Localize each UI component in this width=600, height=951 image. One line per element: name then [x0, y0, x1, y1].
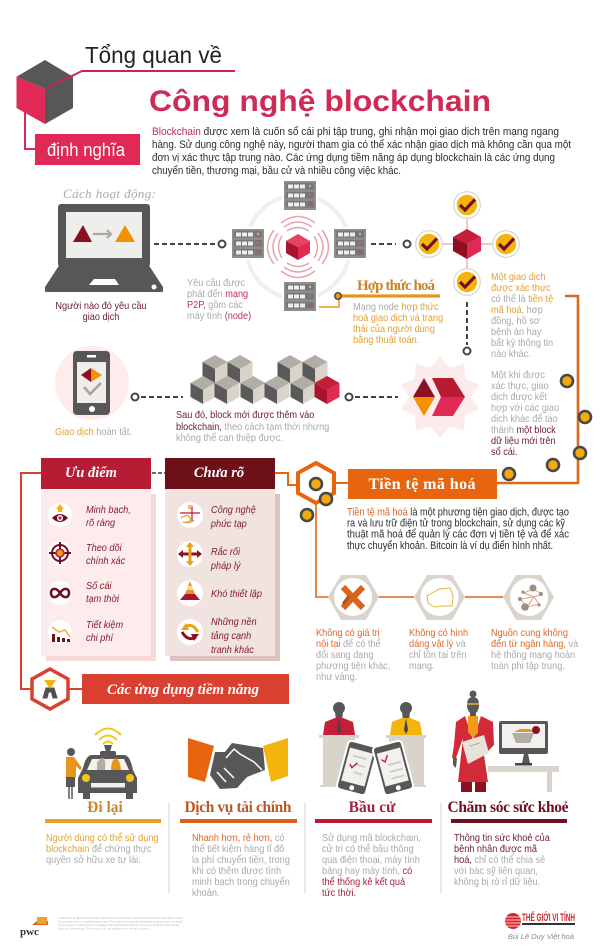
- heading: Đi lại: Đi lại: [87, 799, 124, 816]
- dashed connector 2: [371, 240, 410, 248]
- caption: transaction complete: Giao dịch hoàn tất.: [55, 427, 132, 438]
- text: transport: blockchain để chứng thực: [46, 844, 152, 855]
- text: no physical form: [409, 628, 468, 672]
- text: block added: [176, 410, 329, 444]
- intro paragraph: hàng. Sử dụng công nghệ này, người tham gia có thể xác nhận giao dịch mà không cần qua một: [152, 139, 571, 151]
- illustration: handshake: [188, 738, 288, 789]
- text: P2P: Yêu cầu được: [187, 278, 245, 289]
- caption: laptop: giao dịch: [83, 312, 119, 323]
- text: no intrinsic value: như vàng.: [316, 672, 357, 683]
- icon: smartphone: [55, 346, 129, 420]
- text: validated transaction: đồng, hồ sơ: [491, 316, 540, 327]
- text: no intrinsic value: phương tiện khác,: [316, 661, 390, 672]
- text: validated transaction: bệnh án hay: [491, 327, 542, 338]
- connector: crypto features: [316, 503, 503, 597]
- text: new block: [491, 370, 559, 458]
- text: healthcare: bệnh nhân được mã: [454, 844, 538, 855]
- intro paragraph: [152, 126, 571, 177]
- panel: Ưu điểm: Minh bạch,: [86, 505, 131, 516]
- dashed connector 5: [132, 394, 183, 400]
- panel: Chưa rõ: Khó thiết lập: [211, 589, 263, 600]
- text: no physical form: Không có hình: [409, 628, 468, 639]
- panel: Chưa rõ: Những nền: [211, 617, 257, 628]
- panel: Chưa rõ: Công nghệ: [211, 505, 256, 516]
- text: healthcare: hoá, chỉ có thể chia sẻ: [454, 855, 545, 866]
- heading: Cách hoạt động: Cách hoạt động:: [63, 186, 156, 201]
- label: định nghĩa: định nghĩa: [47, 140, 126, 160]
- icon: blockchain cubes: [190, 355, 340, 404]
- text: no intrinsic value: đổi sang dạng: [316, 650, 374, 661]
- text: new block: hợp với các giao: [491, 403, 559, 414]
- validation check diagram: [416, 192, 519, 295]
- header line: [45, 71, 235, 89]
- dashed connector 3: [464, 302, 470, 354]
- credit: Bùi Lê Duy Việt hoá: [508, 932, 574, 941]
- panel: Chưa rõ: Rắc rối: [211, 547, 241, 558]
- illustration: self-driving car: [66, 728, 137, 799]
- text: P2P: P2P, gồm các: [187, 300, 243, 311]
- text: healthcare: với bác sỹ liên quan,: [454, 866, 538, 877]
- text: no intrinsic value: nội tại để có thể: [316, 639, 381, 650]
- legal small print: Attorney advertising. Prior results do not guarantee a similar outcome.: [58, 928, 150, 930]
- text: finance: khoản.: [192, 888, 220, 899]
- text: validated transaction: Một giao dịch: [491, 272, 546, 283]
- heading: Bầu cử: Bầu cử: [349, 799, 396, 816]
- logo: pwc: pwc: [20, 926, 39, 938]
- icon: cost chart: [52, 627, 70, 642]
- panel: Ưu điểm: Số cái: [86, 581, 112, 592]
- label: định nghĩa: [35, 134, 140, 165]
- icon: laptop: [45, 204, 163, 292]
- text: crypto definition: ra và lưu trữ điện tử trong blockchain, sử dụng các kỹ: [347, 518, 566, 530]
- text: validated transaction: có thể là tiền tệ: [491, 294, 553, 305]
- connector to definition label: [25, 108, 36, 149]
- caption: laptop: Người nào đó yêu cầu: [55, 301, 147, 312]
- text: finance: [192, 833, 290, 899]
- dash between headers: [152, 472, 165, 474]
- text: healthcare: [454, 833, 550, 888]
- banner: Các ứng dụng tiềm năng: [82, 674, 289, 704]
- panel: Ưu điểm: tạm thời: [86, 594, 120, 605]
- heading: Bầu cử: [315, 799, 432, 823]
- text: finance: thể tiết kiệm hàng tỉ đô: [192, 844, 284, 855]
- P2P network diagram: [230, 178, 368, 313]
- text: validation: bằng thuật toán.: [353, 335, 419, 346]
- legal small print: Each member firm is a separate legal entity. This content is for general information purposes only, and should: [58, 920, 184, 924]
- icon: decentralised network: [503, 575, 554, 620]
- panel: Ưu điểm: [41, 489, 156, 661]
- text: finance: minh bạch trong chuyển: [192, 877, 290, 888]
- text: block added: Sau đó, block mới được thêm vào: [176, 410, 314, 421]
- icon: infinity: [51, 589, 69, 597]
- text: finance: khi có thêm được tính: [192, 866, 281, 877]
- intro paragraph: Blockchain được xem là cuốn sổ cái phi tập trung, ghi nhận mọi giao dịch trên mạng ngang: [152, 126, 559, 138]
- text: voting: bảng hay máy tính, có: [322, 866, 412, 877]
- text: voting: tức thời.: [322, 888, 356, 899]
- title: Tổng quan về: Tổng quan về: [85, 42, 222, 68]
- text: new block: thành một block: [491, 425, 556, 436]
- icon: legal arrows: [178, 542, 202, 566]
- panel: Ưu điểm: Theo dõi: [86, 543, 122, 554]
- text: validated transaction: [491, 272, 553, 360]
- icon: eye: [52, 504, 68, 522]
- banner: Các ứng dụng tiềm năng: Các ứng dụng tiềm năng: [107, 682, 260, 698]
- heading: Hợp thức hoá: Hợp thức hoá: [357, 278, 436, 294]
- icon: complex tech: [180, 506, 200, 523]
- panel header: Chưa rõ: [165, 458, 275, 489]
- text: crypto definition: thuật mã hoá để quản lý các đơn vị tiền tệ và để xác: [347, 528, 570, 540]
- text: validated transaction: bất kỳ thông tin: [491, 338, 553, 349]
- banner: Tiền tệ mã hoá: Tiền tệ mã hoá: [368, 476, 476, 493]
- panel: Chưa rõ: phức tạp: [210, 519, 247, 530]
- text: new block: dữ liệu mới trên: [491, 436, 556, 447]
- legal small print: © 2016 PwC. All rights reserved. PwC refers to the US member firm, and may sometimes refer to the PwC network.: [58, 917, 183, 920]
- text: transport: [46, 833, 159, 866]
- icon: traffic cone: [180, 581, 200, 600]
- dividers: [169, 803, 441, 893]
- text: voting: thể thống kê kết quả: [322, 877, 406, 888]
- icon: new block star: [401, 356, 479, 438]
- orange connector to validation: [319, 293, 440, 307]
- text: voting: [322, 833, 421, 899]
- connector: panels to hexagon: [275, 473, 297, 485]
- illustration: healthcare: [452, 690, 559, 792]
- text: new block: Một khi được: [491, 370, 545, 381]
- text: new block: xác thực, giao: [491, 381, 549, 392]
- text: P2P: [187, 278, 251, 322]
- text: new block: dịch được kết: [491, 392, 547, 403]
- text: validated transaction: được xác thực: [491, 283, 551, 294]
- main heading: Công nghệ blockchain: [149, 85, 491, 118]
- text: validation: hoá giao dịch và trạng: [353, 313, 443, 324]
- text: new block: dịch khác để tạo: [491, 414, 558, 425]
- intro paragraph: chuyển tiền, thương mại, bầu cử và nhiều công việc khác.: [152, 165, 401, 177]
- line to applications banner: [68, 688, 82, 690]
- text: no physical form: dáng vật lý và: [409, 639, 466, 650]
- icon: competing platforms: [181, 623, 199, 641]
- text: no physical form: mạng.: [409, 661, 434, 672]
- logo: pwc: [20, 917, 48, 938]
- text: block added: không thể can thiệp được.: [176, 433, 283, 444]
- text: transport: quyền sở hữu xe tự lái.: [46, 855, 141, 866]
- text: voting: qua điện thoại, máy tính: [322, 855, 420, 866]
- panel: Chưa rõ: tảng cạnh: [211, 631, 251, 642]
- text: decentralised supply: Nguồn cung không: [491, 628, 568, 639]
- illustration: voting: [319, 702, 426, 796]
- text: voting: cử tri có thể bầu thông: [322, 844, 414, 855]
- text: decentralised supply: đến từ ngân hàng, và: [491, 639, 579, 650]
- text: no intrinsic value: [316, 628, 390, 683]
- text: new block: sổ cái.: [491, 447, 517, 458]
- panel: Ưu điểm: rõ ràng: [86, 518, 116, 529]
- text: P2P: máy tính (node): [187, 311, 251, 322]
- dashed connector 1: [154, 240, 226, 248]
- heading: Dịch vụ tài chính: Dịch vụ tài chính: [184, 799, 292, 816]
- caption: laptop: [55, 301, 147, 323]
- legal small print: [58, 917, 184, 930]
- panel: Chưa rõ: tranh khác: [211, 645, 254, 656]
- text: crypto definition: thực chuyển khoản. Bitcoin là ví dụ điển hình nhất.: [347, 540, 553, 552]
- text: healthcare: Thông tin sức khoẻ của: [454, 833, 550, 844]
- icon: no physical form: [414, 575, 465, 620]
- text: decentralised supply: [491, 628, 579, 672]
- dashed connector 4: [346, 394, 398, 400]
- logo: Thế giới vi tính: [505, 911, 575, 929]
- text: validated transaction: nào khác.: [491, 349, 531, 360]
- text: validation: [353, 302, 443, 346]
- banner: Tiền tệ mã hoá: [348, 469, 497, 499]
- legal small print: not be used as a substitute for consultation with professional advisors. Please see www for further details.: [58, 924, 180, 927]
- text: crypto definition: Tiền tệ mã hoá là một phương tiện giao dịch, được tạo: [347, 506, 569, 518]
- heading: Chăm sóc sức khoẻ: Chăm sóc sức khoẻ: [448, 799, 569, 816]
- heading: Dịch vụ tài chính: [180, 799, 297, 823]
- panel: Ưu điểm: chi phí: [86, 633, 114, 644]
- panel header: Ưu điểm: [41, 458, 151, 489]
- text: block added: blockchain, theo cách tạm thời nhưng: [176, 422, 329, 433]
- line hexagon to banner: [334, 482, 348, 484]
- text: validation: thái của người dùng: [353, 324, 435, 335]
- panel: Chưa rõ: pháp lý: [210, 561, 242, 572]
- orange line to crypto: [497, 296, 578, 483]
- text: transport: Người dùng có thể sử dụng: [46, 833, 159, 844]
- text: decentralised supply: toàn phi tập trung.: [491, 661, 565, 672]
- text: finance: Nhanh hơn, rẻ hơn, có: [192, 833, 285, 844]
- hexagon: applications: [32, 669, 68, 709]
- text: no intrinsic value: Không có giá trị: [316, 628, 380, 639]
- panel header: Chưa rõ: Chưa rõ: [194, 465, 244, 481]
- panel: Chưa rõ: [165, 489, 280, 661]
- hexagon: crypto: [298, 463, 334, 505]
- panel header: Ưu điểm: Ưu điểm: [65, 465, 117, 481]
- text: validation: Mạng node hợp thức: [353, 302, 439, 313]
- panel: Ưu điểm: Tiết kiệm: [86, 620, 123, 631]
- text: decentralised supply: hệ thống mạng hoàn: [491, 650, 575, 661]
- icon: target: [49, 542, 71, 564]
- icon: cube logo: [16, 60, 73, 124]
- panel: Ưu điểm: chính xác: [86, 556, 125, 567]
- text: healthcare: không bị rò rỉ dữ liệu.: [454, 877, 540, 888]
- text: voting: Sử dụng mã blockchain,: [322, 833, 421, 844]
- coin beads: [301, 375, 591, 521]
- text: finance: la phí chuyển tiền, trong: [192, 855, 290, 866]
- text: crypto definition: [347, 506, 570, 552]
- text: validated transaction: mã hoá, hợp: [491, 305, 543, 316]
- icon: no intrinsic value: [328, 575, 379, 620]
- text: P2P: phát đến mạng: [187, 289, 248, 300]
- intro paragraph: đơn vị xác thực tập trung nào. Các ứng dụng tiềm năng áp dụng blockchain là các ứng dụng: [152, 152, 555, 164]
- heading: Đi lại: [45, 799, 161, 823]
- connector: Ưu điểm to applications: [21, 473, 41, 689]
- text: no physical form: chỉ tồn tại trên: [409, 650, 467, 661]
